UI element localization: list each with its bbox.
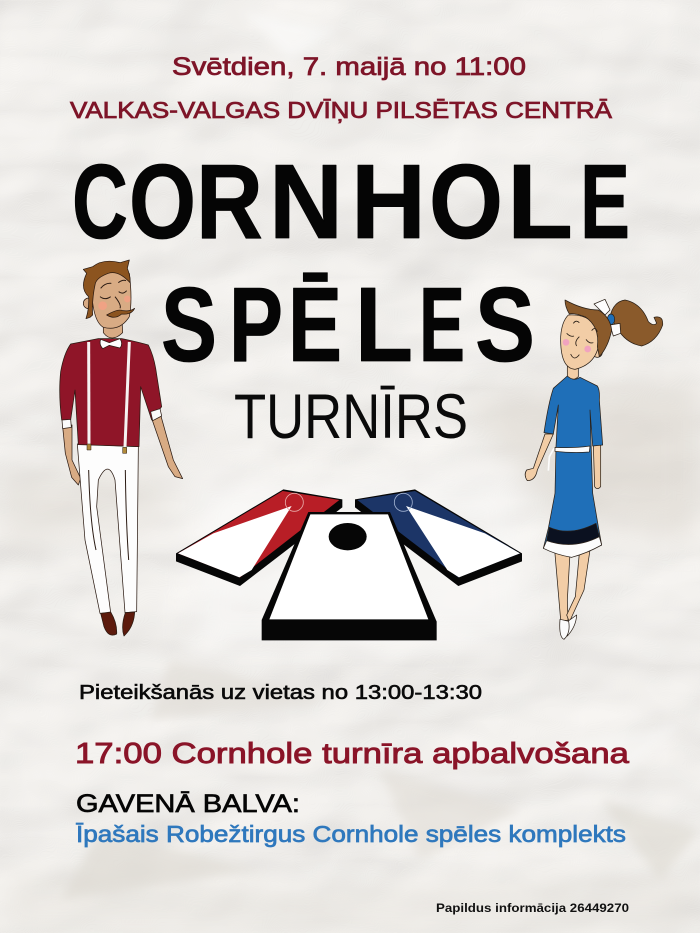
man bow tie bbox=[100, 339, 122, 349]
right board bbox=[355, 489, 522, 586]
woman ponytail bbox=[610, 300, 663, 346]
title: CORNHOLE: L bbox=[507, 143, 573, 261]
title: CORNHOLE: C bbox=[72, 143, 128, 261]
woman neck and face bbox=[567, 365, 578, 380]
woman face bbox=[567, 321, 597, 358]
woman blush bbox=[563, 339, 591, 352]
man trousers bbox=[77, 444, 138, 613]
man neck and head bbox=[103, 320, 123, 338]
woman shoes bbox=[567, 615, 577, 636]
man face bbox=[100, 280, 127, 308]
subtitle: TURNĪRS: TURNĪRS bbox=[234, 382, 468, 452]
man moustache bbox=[107, 308, 135, 317]
centre board bbox=[262, 512, 437, 640]
main prize heading: GAVENĀ BALVA: bbox=[76, 790, 300, 818]
woman hair bbox=[565, 300, 612, 357]
man blush bbox=[98, 296, 131, 310]
title: SPĒLES: E bbox=[419, 266, 465, 384]
woman skirt hem bbox=[547, 523, 599, 545]
man shoes bbox=[101, 612, 135, 636]
title: SPĒLES: S bbox=[161, 266, 217, 384]
title: SPĒLES: Ē bbox=[288, 266, 342, 384]
title: CORNHOLE: O bbox=[129, 143, 196, 261]
man arms bbox=[63, 415, 183, 485]
man cuffs bbox=[62, 409, 162, 429]
woman dress bbox=[543, 376, 603, 557]
main prize description: Īpašais Robežtirgus Cornhole spēles komplekts bbox=[76, 821, 626, 847]
title: SPĒLES bbox=[161, 266, 535, 384]
woman legs bbox=[555, 550, 590, 622]
location line: VALKAS-VALGAS DVĪŅU PILSĒTAS CENTRĀ bbox=[70, 97, 613, 123]
title: CORNHOLE: E bbox=[580, 143, 630, 261]
title: CORNHOLE: O bbox=[429, 143, 503, 261]
man hair bbox=[83, 260, 130, 319]
title: SPĒLES: P bbox=[229, 266, 283, 384]
trouser creases bbox=[89, 470, 129, 560]
title: SPĒLES: S bbox=[475, 266, 535, 384]
title: CORNHOLE bbox=[72, 143, 630, 261]
title: CORNHOLE: H bbox=[351, 143, 426, 261]
illustration: cornhole boards bbox=[176, 489, 522, 640]
man sweater bbox=[60, 339, 162, 447]
title: SPĒLES: L bbox=[355, 266, 413, 384]
woman bow bbox=[594, 299, 621, 336]
contact info: Papildus informācija 26449270 bbox=[436, 903, 629, 915]
date line: Svētdien, 7. maijā no 11:00 bbox=[172, 53, 526, 81]
illustration: woman bbox=[525, 299, 663, 639]
woman belt bbox=[555, 446, 590, 453]
award ceremony line: 17:00 Cornhole turnīra apbalvošana bbox=[75, 738, 630, 770]
title: CORNHOLE: N bbox=[269, 143, 343, 261]
woman arms bbox=[525, 434, 601, 489]
registration note: Pieteikšanās uz vietas no 13:00-13:30 bbox=[79, 682, 482, 704]
title: CORNHOLE: R bbox=[196, 143, 263, 261]
illustration: man bbox=[60, 260, 183, 636]
man braces bbox=[89, 342, 129, 447]
left board bbox=[176, 489, 342, 586]
